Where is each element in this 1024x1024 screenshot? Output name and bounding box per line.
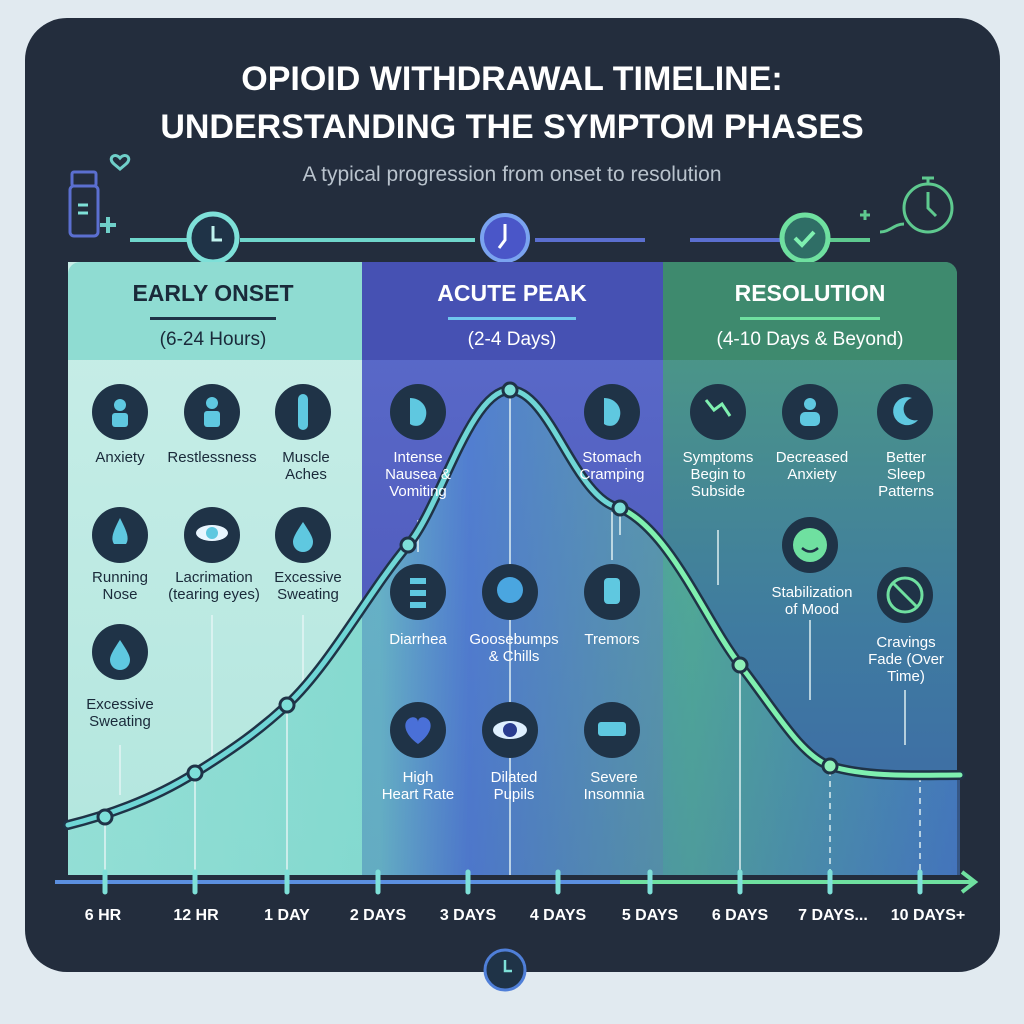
- symptom icons: [92, 384, 933, 758]
- early onset labels: [86, 449, 342, 730]
- axis labels: 12 HR: [173, 907, 219, 924]
- axis labels: 4 DAYS: [530, 907, 586, 924]
- panel: resolution: RESOLUTION: [735, 280, 885, 306]
- acute peak labels: & Chills: [489, 648, 539, 665]
- panel: early onset: (6-24 Hours): [160, 329, 266, 350]
- acute peak labels: Pupils: [494, 786, 534, 803]
- early onset labels: Muscle: [282, 449, 330, 466]
- panel: acute peak: ACUTE PEAK: [437, 280, 587, 306]
- axis labels: 6 DAYS: [712, 907, 768, 924]
- timeline connector: [130, 238, 870, 242]
- phase markers: [189, 214, 828, 262]
- resolution labels: of Mood: [785, 601, 839, 618]
- early onset labels: Excessive: [86, 696, 154, 713]
- time axis: [55, 872, 975, 892]
- acute peak labels: Heart Rate: [382, 786, 454, 803]
- resolution labels: Cravings: [876, 634, 936, 651]
- icon: medicine bottle: [70, 156, 129, 236]
- resolution labels: [683, 449, 944, 685]
- early onset labels: Sweating: [89, 713, 151, 730]
- panel: acute peak: [362, 262, 663, 875]
- acute peak labels: Stomach: [582, 449, 642, 466]
- resolution labels: Decreased: [776, 449, 848, 466]
- early onset labels: Anxiety: [95, 449, 145, 466]
- acute peak labels: Diarrhea: [389, 631, 447, 648]
- resolution labels: Anxiety: [787, 466, 837, 483]
- acute peak labels: Tremors: [584, 631, 640, 648]
- icon glyphs: [110, 394, 922, 744]
- title: UNDERSTANDING THE SYMPTOM PHASES: [160, 108, 864, 146]
- early onset labels: (tearing eyes): [168, 586, 260, 603]
- acute peak labels: Nausea &: [385, 466, 451, 483]
- early onset labels: Aches: [285, 466, 327, 483]
- panel: early onset: [68, 262, 362, 875]
- axis labels: 2 DAYS: [350, 907, 406, 924]
- acute peak labels: Dilated: [491, 769, 537, 786]
- early onset labels: Sweating: [277, 586, 339, 603]
- acute peak labels: Insomnia: [584, 786, 645, 803]
- resolution labels: Time): [887, 668, 925, 685]
- icon: bottom clock: [485, 950, 525, 990]
- curve points: [98, 383, 837, 824]
- drop lines: [105, 395, 920, 875]
- resolution labels: Symptoms: [683, 449, 753, 466]
- title: OPIOID WITHDRAWAL TIMELINE:: [241, 60, 783, 98]
- early onset labels: Running: [92, 569, 148, 586]
- subtitle: A typical progression from onset to resolution: [302, 163, 722, 186]
- acute peak labels: Intense: [393, 449, 443, 466]
- resolution labels: Stabilization: [772, 584, 852, 601]
- panel: acute peak: (2-4 Days): [468, 329, 556, 350]
- resolution labels: Sleep: [887, 466, 925, 483]
- resolution labels: Better: [886, 449, 926, 466]
- acute peak labels: High: [403, 769, 433, 786]
- severity curve: [68, 390, 960, 825]
- early onset labels: Nose: [102, 586, 138, 603]
- axis labels: 10 DAYS+: [891, 907, 965, 924]
- early onset labels: Lacrimation: [175, 569, 253, 586]
- axis labels: 1 DAY: [264, 907, 310, 924]
- axis labels: 3 DAYS: [440, 907, 496, 924]
- icon: stopwatch: [860, 178, 952, 232]
- early onset labels: Excessive: [274, 569, 342, 586]
- resolution labels: Patterns: [878, 483, 934, 500]
- resolution labels: Fade (Over: [868, 651, 944, 668]
- panel: resolution: (4-10 Days & Beyond): [717, 329, 903, 350]
- acute peak labels: Severe: [590, 769, 638, 786]
- panel: resolution: [663, 262, 957, 875]
- title: [160, 60, 864, 146]
- acute peak labels: [382, 449, 645, 803]
- panel: early onset: EARLY ONSET: [132, 280, 294, 306]
- axis labels: 5 DAYS: [622, 907, 678, 924]
- acute peak labels: Cramping: [579, 466, 645, 483]
- resolution labels: Begin to: [690, 466, 746, 483]
- axis labels: 6 HR: [85, 907, 122, 924]
- early onset labels: Restlessness: [167, 449, 257, 466]
- resolution labels: Subside: [691, 483, 745, 500]
- acute peak labels: Vomiting: [389, 483, 447, 500]
- axis labels: 7 DAYS...: [798, 907, 868, 924]
- axis labels: [85, 907, 965, 924]
- curve area fill: [68, 390, 960, 875]
- acute peak labels: Goosebumps: [469, 631, 559, 648]
